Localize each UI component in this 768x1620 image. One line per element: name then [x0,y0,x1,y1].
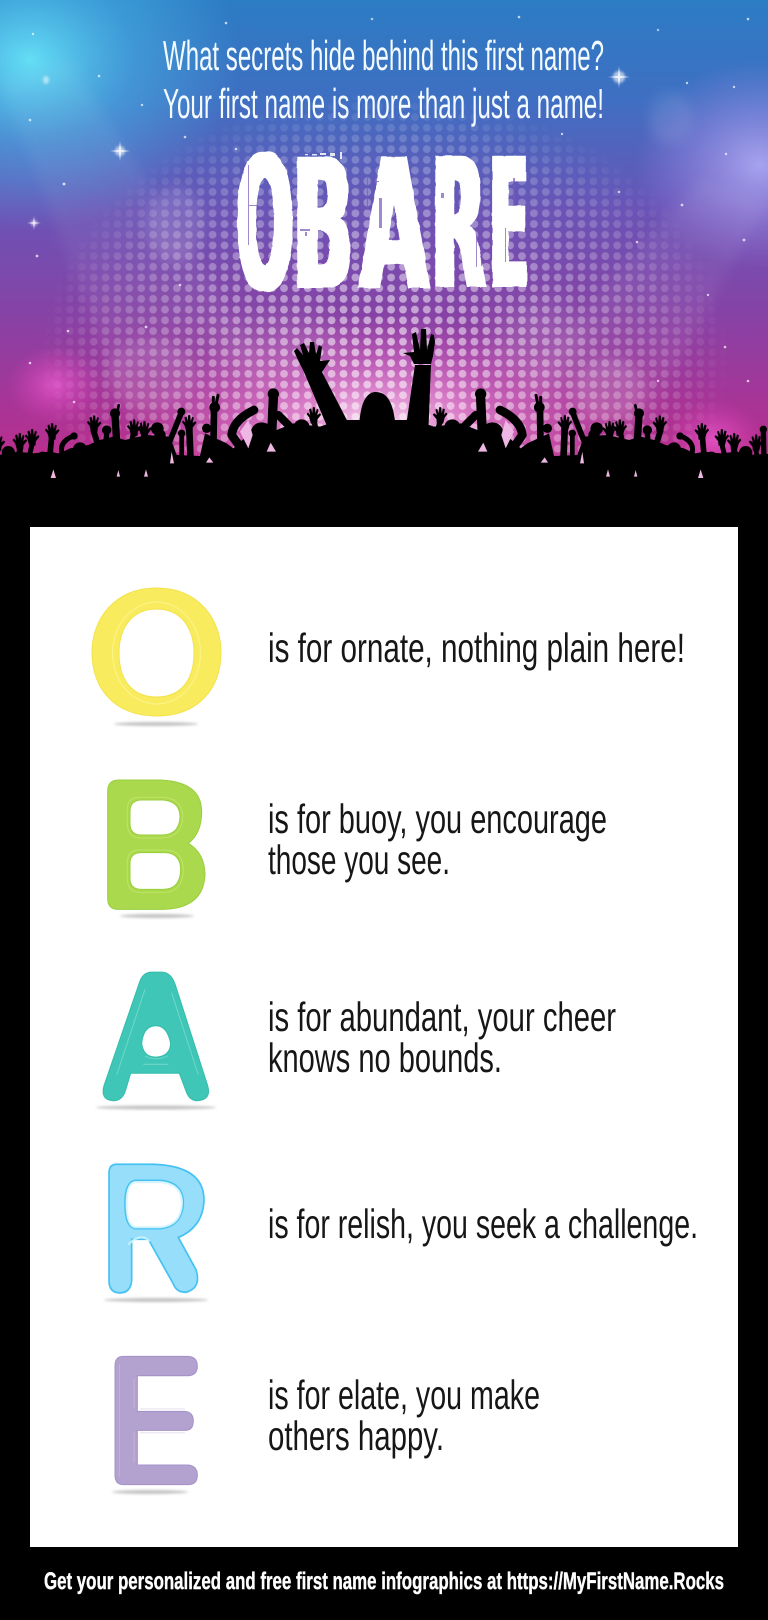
title: OBARE: B [293,122,353,331]
text: E lines [268,1372,540,1459]
header background with lights [0,0,768,456]
icon: blue letter R [104,1164,208,1302]
row: letter E [112,1356,540,1494]
title: OBARE: O [237,117,293,333]
text: A lines: knows no bounds. [268,1035,502,1081]
title: OBARE [237,117,528,333]
main figure with raised arms [294,329,435,450]
text: A lines [268,994,616,1081]
title: OBARE: A [360,122,428,331]
icon: yellow letter O [92,588,221,726]
row: letter B [108,780,607,918]
text: B lines: those you see. [268,837,450,883]
sparkle stars [27,16,749,403]
crowd silhouette [0,329,768,530]
row: letter R [104,1164,698,1302]
infographic canvas: E [490,121,528,330]
row: letter O [92,588,685,726]
text: E lines: is for elate, you make [268,1372,540,1418]
text: E lines: others happy. [268,1413,444,1459]
title: OBARE: R [432,121,485,330]
text: B lines [268,796,607,883]
icon: green letter B [108,780,205,918]
text: A lines: is for abundant, your cheer [268,994,616,1040]
icon: purple letter E [112,1356,197,1494]
heading: intro question [163,32,604,127]
icon: teal letter A [96,972,216,1110]
row: letter A [96,972,616,1110]
text: B lines: is for buoy, you encourage [268,796,607,842]
panel: white content card [30,527,738,1547]
